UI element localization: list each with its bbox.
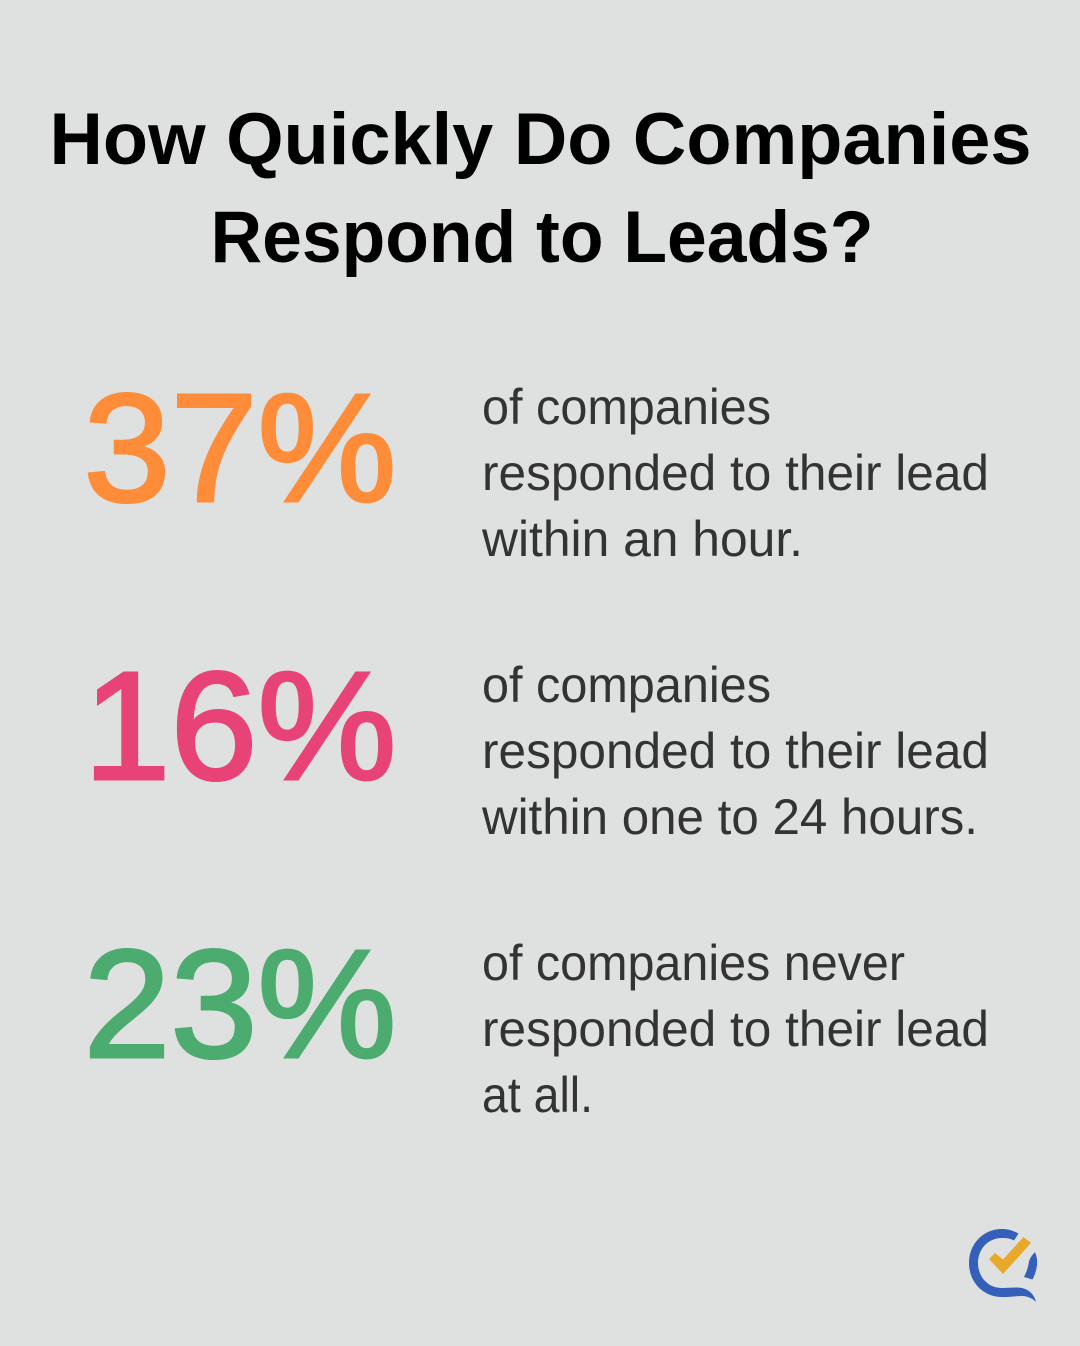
description: within an hour: responded to their lead (482, 444, 989, 501)
description: never responded: of companies never (482, 934, 905, 991)
description: within an hour: within an hour. (481, 510, 803, 567)
description: never responded (482, 934, 989, 1123)
description: within an hour: of companies (482, 378, 771, 435)
description: within an hour (481, 378, 989, 567)
icon: logo speech bubble with check mark (969, 1229, 1037, 1302)
description: one to 24 hours: responded to their lead (482, 722, 989, 779)
stat: 37% (84, 362, 989, 567)
description: one to 24 hours (481, 656, 989, 845)
description: one to 24 hours: within one to 24 hours. (481, 788, 978, 845)
title: How Quickly Do Companies (50, 99, 1032, 180)
description: one to 24 hours: of companies (482, 656, 771, 713)
title: Respond to Leads? (210, 197, 874, 278)
number: 23%: 23% (84, 918, 396, 1090)
description: never responded: responded to their lead (482, 1000, 989, 1057)
number: 37%: 37% (84, 362, 396, 534)
stat: 16% (84, 640, 989, 845)
description: never responded: at all. (482, 1066, 593, 1123)
title (50, 99, 1032, 278)
number: 16%: 16% (84, 640, 396, 812)
stat: 23% (84, 918, 989, 1123)
